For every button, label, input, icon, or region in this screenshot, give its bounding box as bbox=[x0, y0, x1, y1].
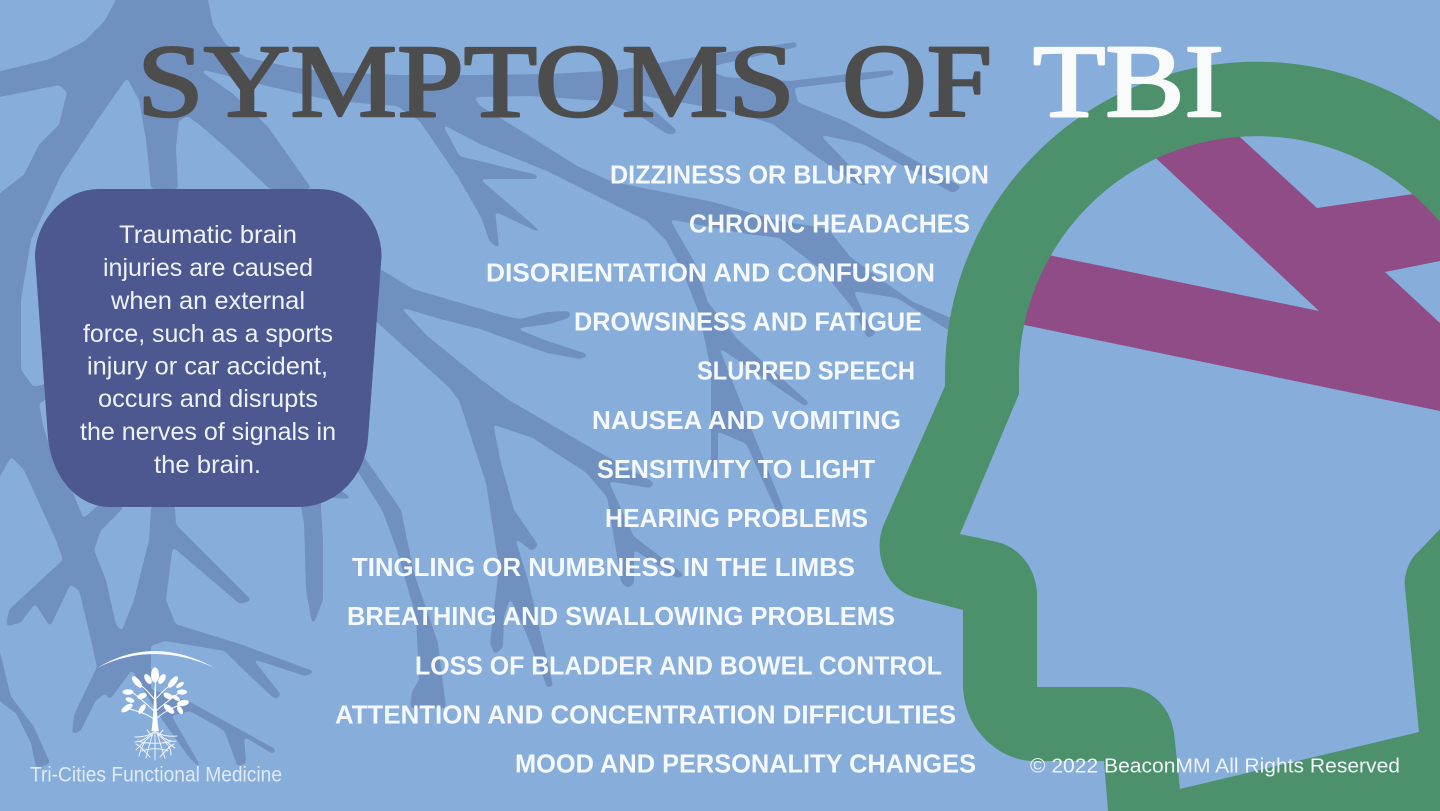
callout shape bbox=[35, 189, 382, 507]
background nerve branches bbox=[0, 0, 960, 767]
title: OF bbox=[842, 24, 992, 139]
panel: definition callout bbox=[35, 189, 382, 507]
symptoms list: CHRONIC HEADACHES bbox=[689, 208, 970, 238]
title bbox=[137, 24, 1224, 139]
symptoms list: MOOD AND PERSONALITY CHANGES bbox=[515, 748, 976, 778]
icon: tree with roots bbox=[120, 668, 189, 760]
callout text: when an external bbox=[110, 287, 305, 315]
symptoms list: DIZZINESS OR BLURRY VISION bbox=[610, 159, 989, 189]
callout text: occurs and disrupts bbox=[98, 385, 318, 413]
title: SYMPTOMS bbox=[137, 24, 795, 139]
callout text: injuries are caused bbox=[103, 254, 313, 282]
callout text: the nerves of signals in bbox=[80, 418, 336, 446]
symptoms list bbox=[335, 159, 989, 779]
logo: Tri-Cities Functional Medicine bbox=[30, 651, 282, 786]
callout text bbox=[80, 221, 336, 479]
callout text: force, such as a sports bbox=[83, 320, 333, 348]
copyright notice: © 2022 BeaconMM All Rights Reserved bbox=[1030, 756, 1400, 778]
symptoms list: DROWSINESS AND FATIGUE bbox=[574, 307, 922, 337]
head outline bbox=[880, 62, 1440, 811]
symptoms list: SENSITIVITY TO LIGHT bbox=[597, 454, 875, 484]
symptoms list: DISORIENTATION AND CONFUSION bbox=[486, 258, 935, 288]
logo wordmark: Tri-Cities Functional Medicine bbox=[30, 764, 282, 786]
callout text: the brain. bbox=[154, 451, 261, 479]
symptoms list: TINGLING OR NUMBNESS IN THE LIMBS bbox=[352, 552, 855, 582]
callout text: Traumatic brain bbox=[119, 221, 297, 249]
symptoms list: SLURRED SPEECH bbox=[697, 356, 915, 386]
symptoms list: NAUSEA AND VOMITING bbox=[592, 405, 901, 435]
head illustration bbox=[880, 62, 1440, 811]
injury band bbox=[1000, 91, 1440, 411]
logo arc bbox=[97, 651, 215, 668]
callout text: injury or car accident, bbox=[87, 352, 328, 380]
symptoms list: BREATHING AND SWALLOWING PROBLEMS bbox=[347, 601, 895, 631]
symptoms list: ATTENTION AND CONCENTRATION DIFFICULTIES bbox=[335, 699, 956, 729]
symptoms list: LOSS OF BLADDER AND BOWEL CONTROL bbox=[415, 650, 942, 680]
symptoms list: HEARING PROBLEMS bbox=[605, 503, 868, 533]
title: TBI bbox=[1033, 24, 1224, 139]
